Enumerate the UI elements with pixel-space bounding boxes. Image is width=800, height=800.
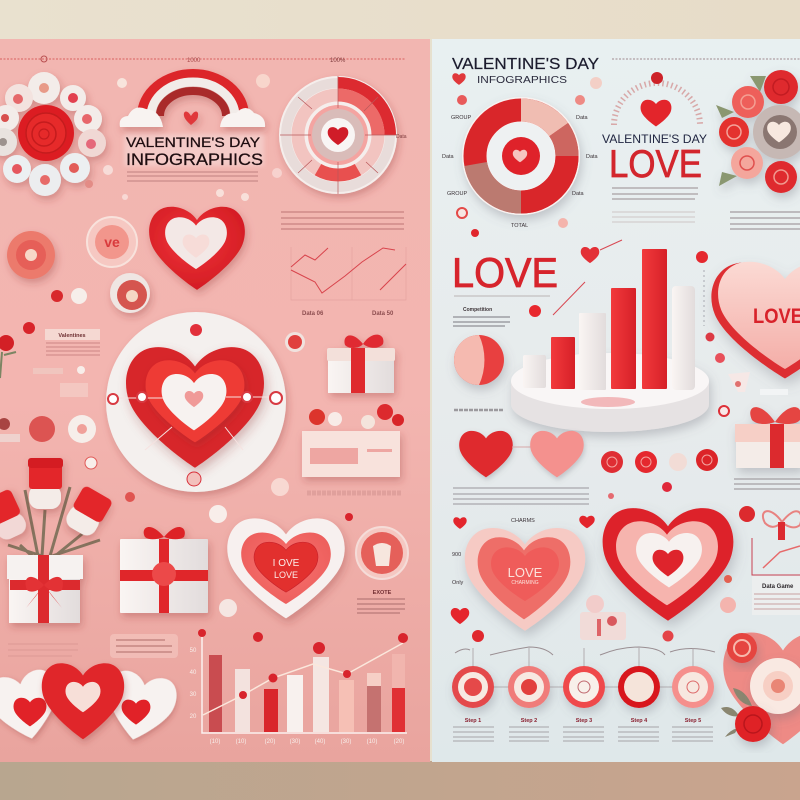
text block: bottom right small: [357, 590, 405, 613]
timeline labels: Step 2: [521, 718, 537, 724]
text block right mid: [734, 479, 800, 489]
heart: pink love: [465, 528, 585, 631]
icon: rose cluster: [716, 70, 800, 193]
heart: white center: [162, 374, 226, 430]
step five: [672, 666, 714, 708]
axis labels: (40): [315, 739, 325, 745]
trend line: [198, 629, 408, 715]
icon: glass coin: [356, 527, 408, 579]
icon: gift box two: [120, 527, 208, 613]
heart label love: CHARMING: [511, 580, 539, 586]
heart label: [273, 558, 300, 580]
podium label: [581, 397, 635, 407]
header dotted rule: [0, 56, 405, 64]
badge: ve: [87, 217, 137, 267]
text block love: [612, 188, 698, 222]
axis labels: 20: [190, 714, 197, 720]
text blocks mid bottom: [8, 634, 178, 658]
text block two hearts: [453, 488, 589, 504]
chart: mini chart right: Data Game: [762, 584, 794, 590]
text block left of podium: [453, 307, 510, 326]
arrow: heart with line: [529, 240, 708, 317]
icon row: red tokens: [601, 449, 718, 499]
icon: red heart with white heart: [149, 207, 245, 290]
step three: [563, 666, 605, 708]
donut labels: GROUP: [447, 191, 468, 197]
labels near pink heart: Only: [452, 580, 464, 586]
chart: pie ball: [454, 335, 504, 385]
axis labels: (20): [265, 739, 275, 745]
chart: mini line chart: Data 50: [372, 311, 394, 317]
title right: INFOGRAPHICS: [477, 74, 567, 86]
bars: [209, 654, 405, 732]
chart: bar and line chart: [190, 629, 408, 745]
axis labels: 30: [190, 692, 197, 698]
small text rule: [454, 295, 550, 297]
timeline labels: Step 5: [685, 718, 701, 724]
title: valentine's day infographics: INFOGRAPHICS: [126, 150, 263, 169]
timeline labels: Step 3: [576, 718, 592, 724]
axis labels: (30): [290, 739, 300, 745]
bars: [523, 249, 695, 390]
title right: VALENTINE'S DAY: [452, 56, 599, 73]
chart: mini line chart: Data 06: [302, 311, 324, 317]
timeline curve: [455, 647, 715, 655]
panel: left pink infographic: [0, 39, 430, 762]
heart label: I OVE: [273, 558, 300, 569]
icon: rainbow with clouds: [120, 74, 265, 127]
icon: faded gift: [580, 595, 626, 640]
icon: gift right: [735, 407, 800, 468]
axis labels: (10): [367, 739, 377, 745]
panel: right light infographic: [432, 39, 800, 762]
chart: radial target left: Data: [396, 134, 407, 140]
chart: radial target left: [279, 76, 407, 194]
backdrop top band: [0, 0, 800, 39]
text block left of podium: Competition: [463, 307, 492, 313]
icon: gift box one: [7, 555, 83, 623]
icon: flower at edge: [0, 335, 16, 378]
title: valentine love: LOVE: [609, 143, 702, 186]
donut labels: TOTAL: [511, 223, 528, 229]
header dotted rule: 100%: [330, 58, 346, 64]
heart label love: LOVE: [508, 565, 543, 580]
icon: trio hearts: [0, 663, 180, 747]
title right: [452, 56, 599, 86]
axis labels: [190, 648, 404, 745]
header dotted rule: 1000: [187, 58, 201, 64]
title: valentine's day infographics: VALENTINE'S DAY: [126, 134, 261, 150]
heart: small pink: [185, 391, 203, 407]
axis labels: 40: [190, 670, 197, 676]
caption under envelope: [307, 490, 402, 496]
small dots near donut: [457, 77, 602, 237]
caption under pie: [454, 409, 503, 411]
timeline text lines: [453, 727, 713, 741]
heart: outer red: [126, 347, 264, 468]
icon: love heart white with red: [227, 518, 345, 618]
small deco hearts and dots left: [0, 74, 353, 617]
axis labels: (30): [341, 739, 351, 745]
heart: middle red: [146, 360, 244, 442]
chart: 3D bar podium: [511, 249, 709, 432]
labels near pink heart: [452, 518, 535, 586]
icon: pink rose: [7, 231, 55, 279]
icon: gift and bow top right: [763, 511, 800, 540]
donut labels: Data: [442, 154, 455, 160]
panel: big white circle with layered heart: [106, 312, 286, 492]
text card: left label: [45, 329, 100, 355]
connector with data markers: [108, 324, 282, 486]
text card: left label: Valentines: [58, 333, 86, 339]
badge: ve: ve: [104, 234, 120, 250]
donut labels: Data: [576, 115, 589, 121]
axis labels: (10): [236, 739, 246, 745]
donut labels: Data: [586, 154, 599, 160]
labels near pink heart: 900: [452, 552, 461, 558]
heart label: LOVE: [274, 570, 298, 580]
big heading: love: LOVE: [452, 249, 558, 296]
heart: layered red: [603, 508, 733, 621]
axis labels: 50: [190, 648, 197, 654]
timeline labels: Step 1: [465, 718, 481, 724]
title: valentine's day infographics: [124, 134, 264, 169]
step two: [508, 666, 550, 708]
donut labels: Data: [572, 191, 585, 197]
step one: [452, 666, 494, 708]
deco dots right middle: [706, 332, 788, 416]
icon: arc and heart: [614, 72, 700, 127]
donut labels: [442, 115, 599, 229]
donut labels: GROUP: [451, 115, 472, 121]
icon: rose heart bottom right: [721, 633, 800, 744]
backdrop bottom band: [0, 761, 800, 800]
axis labels: (20): [394, 739, 404, 745]
axis labels: (10): [210, 739, 220, 745]
icon: coin circle: [110, 273, 150, 313]
text block right of rose: [730, 212, 800, 229]
header dotted rule right: [612, 58, 800, 60]
step four: [618, 666, 660, 708]
labels near pink heart: CHARMS: [511, 518, 535, 524]
text block: bottom right small: EXOTE: [373, 590, 392, 596]
title caption lines: [127, 172, 258, 181]
chart: radial donut right: [457, 92, 585, 220]
icon: envelope with flowers: [302, 404, 404, 477]
heart: love big right: [711, 262, 800, 378]
timeline labels: [465, 718, 701, 724]
icon: rose bouquet: [0, 72, 106, 196]
timeline: five step circles: [452, 648, 714, 708]
chart: mini line chart: [291, 247, 406, 317]
vertical dotted rule: [703, 270, 705, 326]
timeline labels: Step 4: [631, 718, 648, 724]
icon: two hearts: [459, 431, 584, 477]
text block: right of heart: [281, 212, 404, 229]
chart: mini chart right: [752, 538, 800, 615]
icon: gift box with bow, left upper: [327, 335, 395, 393]
title: valentine love: VALENTINE'S DAY: [602, 134, 707, 146]
small hearts right bottom: [451, 506, 755, 642]
icon: tulips: [0, 458, 113, 556]
